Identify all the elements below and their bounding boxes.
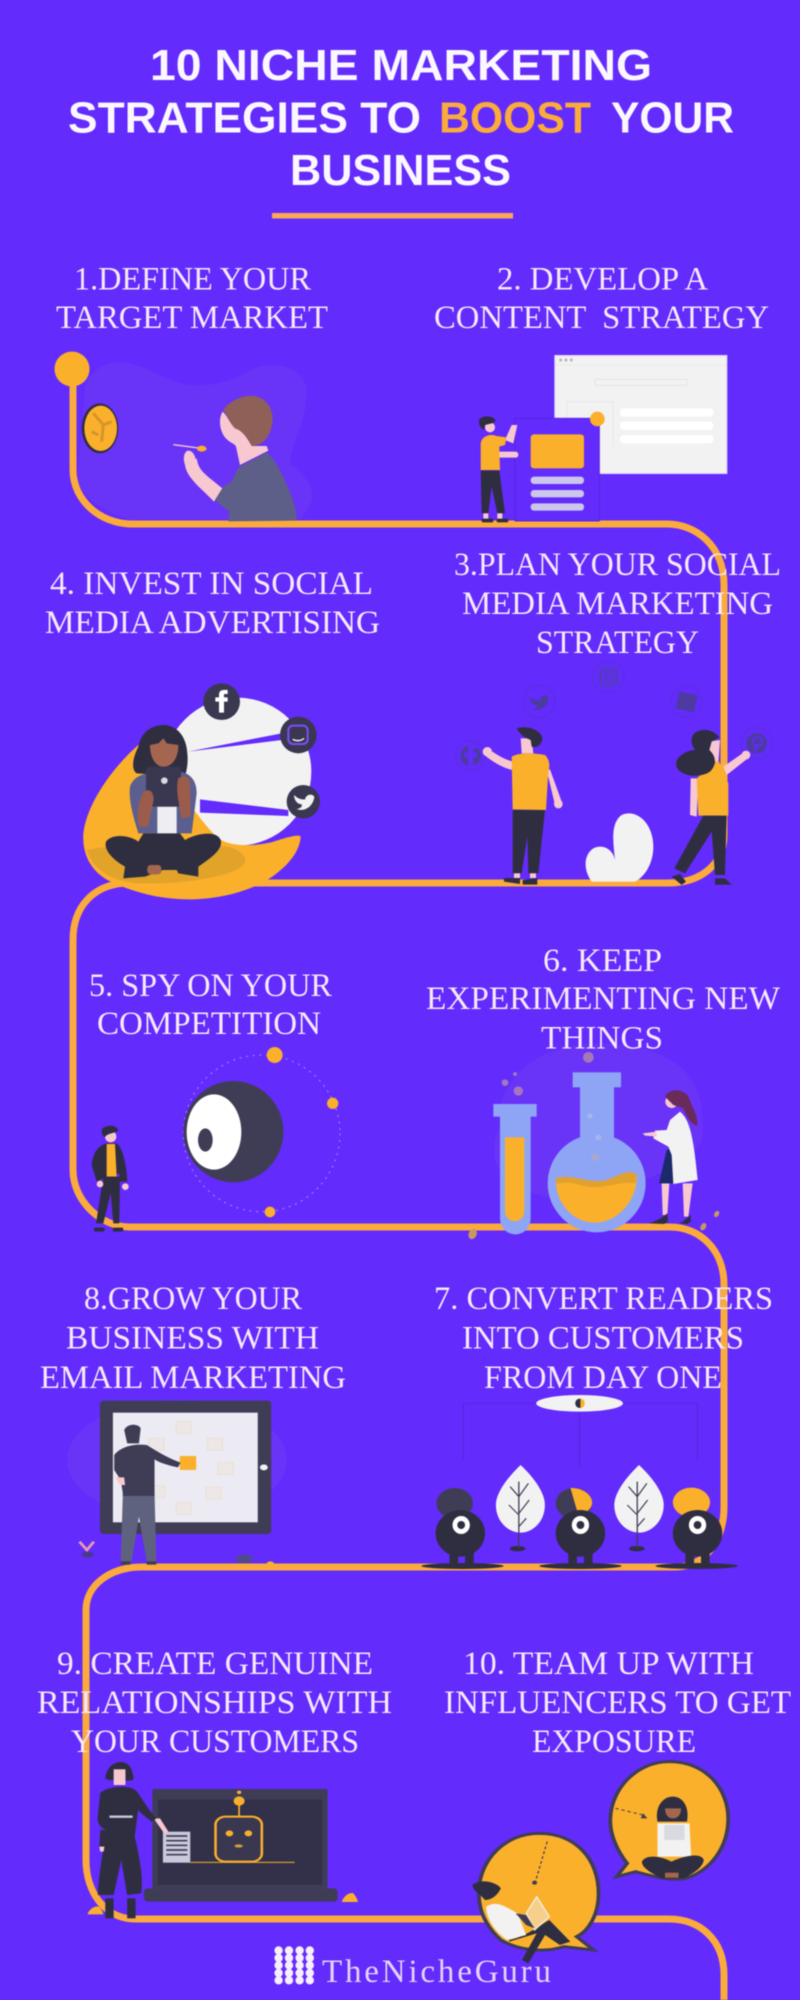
title: STRATEGIES TO <box>68 94 421 142</box>
heading: step 2: CONTENT STRATEGY <box>434 300 769 336</box>
device: tablet <box>100 1401 271 1534</box>
heading: step 1: TARGET MARKET <box>56 300 328 336</box>
illustration: eye creatures and trees <box>421 1395 738 1569</box>
small plant <box>80 1542 94 1550</box>
heading: step 9: 9. CREATE GENUINE <box>57 1646 373 1682</box>
bubble: upper with seated woman <box>610 1762 728 1879</box>
heading: step 6 <box>426 943 781 1056</box>
heading: step 5: COMPETITION <box>97 1006 321 1042</box>
title: 10 NICHE MARKETING <box>150 41 652 90</box>
heading: step 2 <box>434 262 769 336</box>
figure: woman in yellow shirt <box>672 730 750 885</box>
icon: instagram <box>280 717 317 753</box>
heading: step 4 <box>45 566 380 641</box>
heading: step 10 <box>444 1646 791 1760</box>
panel: step 4 social media advertising <box>45 566 380 899</box>
heading: step 7: 7. CONVERT READERS <box>434 1281 773 1317</box>
heading: step 2: 2. DEVELOP A <box>497 262 708 298</box>
illustration: two people and social icons <box>456 661 772 885</box>
heading: step 5 <box>89 968 332 1042</box>
heading: step 8: BUSINESS WITH <box>66 1320 319 1356</box>
illustration: flasks and scientist <box>467 1052 720 1241</box>
icon: watching eye <box>536 1395 623 1412</box>
heading: step 1 <box>56 262 328 336</box>
icon: test tube <box>493 1104 537 1234</box>
panel: step 6 keep experimenting <box>426 943 781 1241</box>
icons: faded social networks <box>456 661 772 771</box>
icon: dartboard <box>82 403 118 453</box>
illustration: woman and robot on laptop <box>88 1762 358 1918</box>
icon: facebook <box>203 683 240 720</box>
title: BOOST <box>439 94 591 142</box>
title underline <box>272 213 513 218</box>
title: BUSINESS <box>290 146 511 195</box>
illustration: man throwing dart <box>82 396 297 521</box>
icon: document <box>163 1832 190 1863</box>
panel: step 5 spy on competition <box>89 968 340 1232</box>
leaves <box>467 1210 720 1241</box>
illustration: woman on beanbag with social icons <box>83 683 320 899</box>
route line <box>54 352 724 2000</box>
heading: step 1: 1.DEFINE YOUR <box>74 262 311 298</box>
heading: step 8: 8.GROW YOUR <box>84 1281 302 1317</box>
heading: step 9 <box>37 1646 392 1760</box>
background blobs <box>67 362 703 1520</box>
shape: yellow beanbag <box>83 745 301 899</box>
device: laptop <box>144 1789 338 1902</box>
heading: step 7 <box>434 1281 773 1396</box>
faint mail tiles <box>149 1422 233 1514</box>
heading: step 3 <box>454 547 781 661</box>
heading: step 10: 10. TEAM UP WITH <box>463 1646 754 1682</box>
heading: step 3: 3.PLAN YOUR SOCIAL <box>454 547 781 583</box>
heading: step 9: YOUR CUSTOMERS <box>71 1724 359 1760</box>
shape: white plant blob <box>586 813 653 882</box>
logo: TheNicheGuru <box>274 1946 551 1990</box>
icon: eye <box>183 1081 283 1182</box>
heading: step 6: THINGS <box>541 1020 663 1056</box>
heading: step 8 <box>40 1281 346 1396</box>
heading: step 5: 5. SPY ON YOUR <box>89 968 332 1004</box>
icon: email <box>180 1456 196 1470</box>
figure: person at board <box>479 416 518 522</box>
illustration: web content window and person <box>479 356 727 522</box>
shadows <box>421 1546 738 1569</box>
heading: step 9: RELATIONSHIPS WITH <box>37 1685 392 1721</box>
heading: step 10: INFLUENCERS TO GET <box>444 1685 791 1721</box>
panel: step 3 social media strategy <box>454 547 781 885</box>
mounds <box>88 1906 103 1914</box>
figure: man from behind <box>114 1425 181 1565</box>
bubbles <box>502 1052 594 1096</box>
heading: step 7: FROM DAY ONE <box>484 1360 722 1396</box>
icon: dot grid <box>274 1946 314 1985</box>
title <box>68 41 734 195</box>
heading: step 4: MEDIA ADVERTISING <box>45 605 380 641</box>
heading: step 6: 6. KEEP <box>543 943 662 979</box>
panel: step 8 email marketing <box>40 1281 346 1567</box>
illustration: man at tablet with email <box>80 1401 274 1567</box>
panel: step 2 content strategy <box>434 262 769 522</box>
icon: twitter <box>287 785 320 818</box>
logo: TheNicheGuru: TheNicheGuru <box>322 1954 551 1990</box>
figure: woman in black <box>98 1762 168 1918</box>
panel: step 9 genuine relationships <box>37 1646 392 1918</box>
illustration: giant eye with orbit and person <box>92 1047 340 1232</box>
creature 2 <box>556 1488 605 1566</box>
heading: step 4: 4. INVEST IN SOCIAL <box>50 566 373 602</box>
figure: scientist <box>643 1090 698 1224</box>
illustration: speech bubbles with people <box>472 1762 728 1963</box>
heading: step 10: EXPOSURE <box>532 1724 696 1760</box>
icon: robot <box>216 1791 262 1862</box>
heading: step 7: INTO CUSTOMERS <box>462 1320 744 1356</box>
creature 1 <box>436 1488 485 1566</box>
figure: seated woman with tablet <box>106 725 221 878</box>
bubble: lower with man on laptop <box>472 1833 599 1963</box>
panel: step 1 define target market <box>56 262 328 521</box>
figure: man in jacket <box>92 1126 129 1232</box>
heading: step 8: EMAIL MARKETING <box>40 1360 346 1396</box>
heading: step 3: STRATEGY <box>536 625 699 661</box>
title: YOUR <box>611 94 734 142</box>
icon: round flask <box>548 1072 646 1232</box>
figure: man in yellow shirt <box>483 727 563 885</box>
heading: step 6: EXPERIMENTING NEW <box>426 981 781 1017</box>
heading: step 3: MEDIA MARKETING <box>462 586 773 622</box>
trees <box>496 1465 664 1548</box>
creature 3 <box>673 1488 722 1566</box>
panel: step 10 influencers <box>444 1646 791 1963</box>
panel: step 7 convert readers <box>421 1281 773 1569</box>
